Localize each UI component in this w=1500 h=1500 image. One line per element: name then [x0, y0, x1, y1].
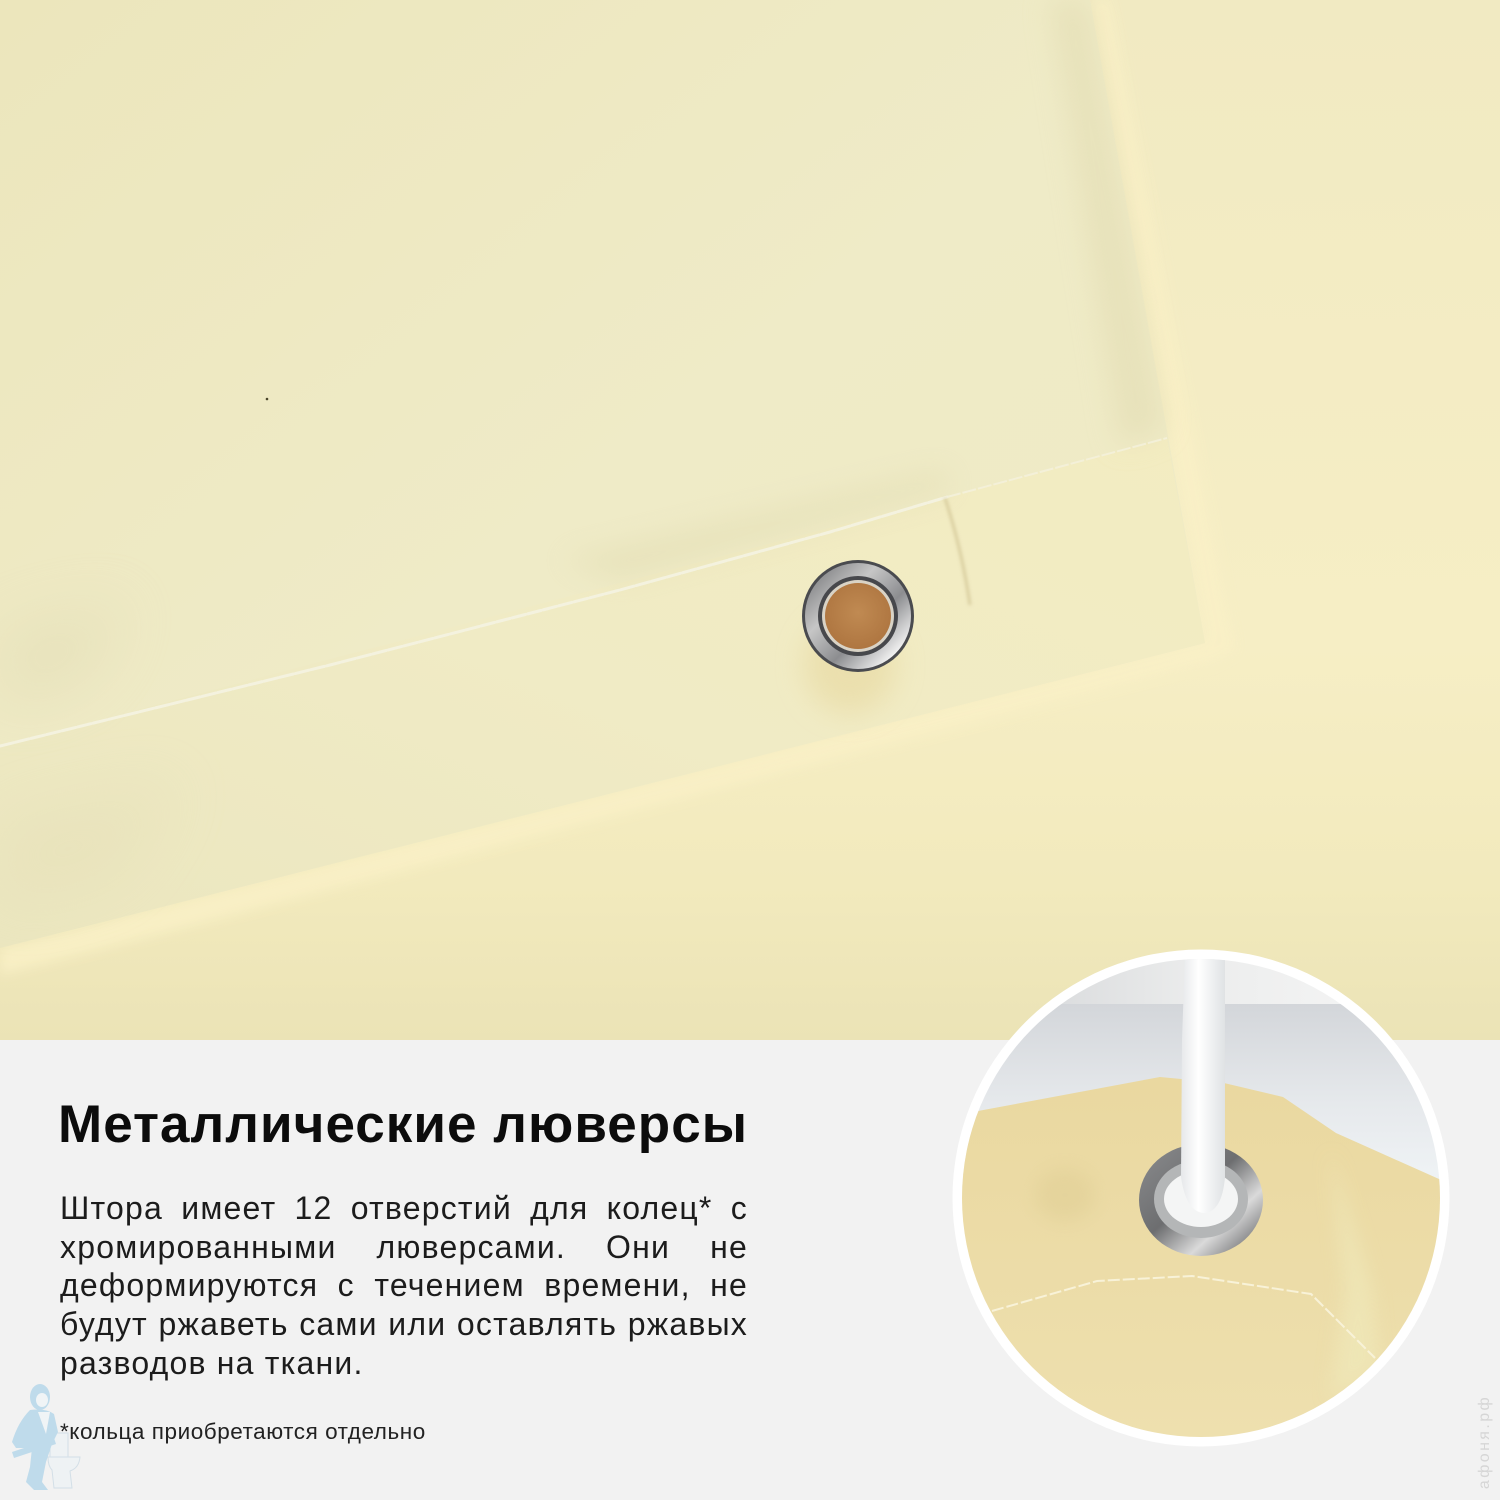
body text block: разводов на ткани. — [60, 1345, 364, 1381]
crease shading above stitch — [560, 470, 950, 580]
faint stitch continuation to the edge — [947, 438, 1167, 497]
darker band inside right edge — [1050, 0, 1164, 445]
background fabric — [0, 0, 1500, 1040]
bright strip beyond fold edges — [0, 0, 1235, 975]
photo: folded cream curtain with grommet — [0, 0, 1500, 1040]
crease beside grommet — [945, 498, 970, 605]
grommet on curtain — [802, 560, 914, 672]
cloth shadow near grommet — [1050, 1184, 1080, 1210]
lower fold shading left — [0, 780, 180, 910]
body text block: деформируются с течением времени, не — [60, 1267, 748, 1303]
body text block: будут ржаветь сами или оставлять ржавых — [60, 1306, 748, 1342]
body text block: Штора имеет 12 отверстий для колец* с — [60, 1190, 748, 1226]
hem stitch line — [0, 497, 947, 746]
small speck on fabric — [266, 398, 268, 400]
watermark: афоня.рф — [1476, 1395, 1493, 1489]
figure — [12, 1384, 58, 1490]
icon: plumber mascot with toilet — [12, 1384, 80, 1490]
footnote: *кольца приобретаются отдельно — [60, 1419, 426, 1444]
upper crease shading left — [0, 600, 130, 710]
body text block — [60, 1190, 748, 1381]
folded top layer of curtain — [0, 0, 1205, 948]
body text block: хромированными люверсами. Они не — [60, 1229, 748, 1265]
inset circle photo: rod through grommet — [952, 950, 1450, 1446]
toilet — [48, 1433, 80, 1488]
face and shirt — [36, 1393, 50, 1434]
cloth shading folds — [1342, 1223, 1372, 1380]
grommet — [1139, 1144, 1263, 1256]
stitch line — [992, 1276, 1375, 1358]
backdrop wall and bathtub edge — [978, 1004, 1439, 1179]
bottom panel background — [0, 1040, 1500, 1500]
curtain cloth — [950, 1077, 1454, 1451]
upper white ledge — [1062, 960, 1340, 1004]
hem band of curtain — [0, 438, 1205, 948]
stain shading around grommet — [804, 617, 896, 713]
circle contents — [962, 959, 1440, 1437]
white circle ring — [952, 950, 1450, 1446]
heading: Металлические люверсы — [58, 1095, 748, 1154]
rod through grommet — [1181, 955, 1225, 1213]
